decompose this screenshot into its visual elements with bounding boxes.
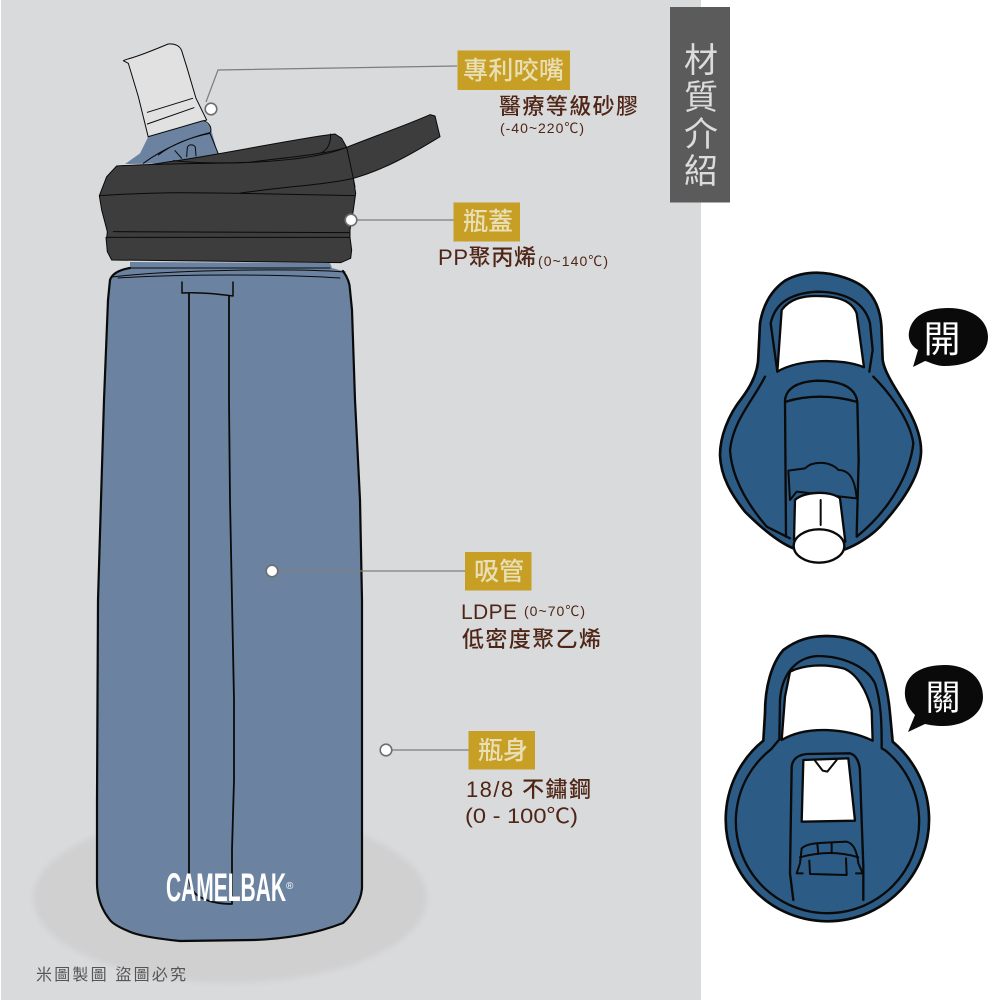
text: mouthpiece temperature: (-40~220℃): [500, 120, 584, 136]
blue valve base: [125, 121, 218, 164]
straw: [189, 294, 234, 904]
straw strap: [117, 115, 440, 193]
panel: grey background: [1, 0, 701, 1000]
text: lid temperature: (0~140℃): [538, 253, 608, 269]
tag: straw: [465, 552, 532, 590]
callout: body: [380, 731, 591, 828]
title text: 紹: [684, 153, 718, 191]
closed lid window: [802, 758, 855, 822]
text: body material: 18/8 不鏽鋼: [466, 777, 591, 802]
closed lid handle hole: [782, 665, 873, 741]
tag: lid: [454, 202, 520, 242]
text: mouthpiece material: 醫療等級砂膠: [499, 94, 638, 119]
text: straw material: LDPE: [461, 601, 517, 624]
title text: 介: [684, 116, 718, 154]
bottle shadow: [33, 813, 427, 983]
title text: 質: [684, 79, 718, 117]
lid seam lines: [100, 134, 355, 233]
open lid slot: [785, 381, 859, 537]
speech bubble: open: 開: [924, 319, 960, 360]
speech bubble: closed: [905, 665, 983, 732]
logo: CamelBak: ®: [286, 881, 294, 892]
tag: mouthpiece: [458, 50, 570, 90]
valve detail: [143, 121, 218, 163]
closed lid slot: [790, 753, 863, 900]
open lid illustration: [720, 273, 921, 563]
bottle body: [97, 262, 362, 941]
open lid latch: [788, 463, 857, 500]
speech bubble: closed: 關: [925, 679, 961, 718]
title text: 材: [684, 42, 718, 80]
lid band: [99, 147, 356, 238]
title text: [684, 42, 718, 191]
illustration: bottle: [97, 44, 440, 941]
callout: straw: [266, 552, 601, 652]
tag: body: [468, 731, 535, 770]
logo: CamelBak: [166, 866, 294, 910]
open lid spout tip: [794, 529, 844, 563]
closed lid latch: [797, 842, 863, 875]
closed lid shape: [726, 636, 929, 921]
open lid shape: [720, 273, 921, 549]
mouthpiece: [123, 44, 207, 137]
tag: body: 瓶身: [478, 737, 528, 765]
text: straw material name: 低密度聚乙烯: [462, 627, 601, 652]
open lid spout: [794, 493, 845, 542]
window notch: [815, 760, 837, 772]
bottle outline: [97, 268, 362, 941]
lower ring: [106, 237, 352, 263]
tag: mouthpiece: 專利咬嘴: [463, 57, 564, 85]
text: straw temperature: (0~70℃): [524, 603, 585, 619]
closed lid inner lines: [736, 656, 919, 913]
logo: CamelBak: CAMELBAK: [166, 866, 286, 910]
bottle lid: [99, 44, 440, 263]
spout mark: [818, 500, 824, 525]
closed lid illustration: [726, 636, 929, 921]
speech bubble: open: [909, 308, 988, 367]
callout: lid: [345, 202, 608, 270]
mouthpiece ridges: [147, 98, 194, 124]
footer note: 米圖製圖 盜圖必究: [36, 966, 186, 984]
straw tab: [182, 282, 233, 296]
open lid handle hole: [777, 296, 864, 372]
title panel: [670, 7, 730, 202]
text: lid material: PP聚丙烯: [438, 245, 536, 270]
callout: mouthpiece: [205, 50, 638, 136]
tag: straw: 吸管: [474, 558, 524, 586]
tag: lid: 瓶蓋: [463, 208, 513, 236]
text: body temperature: (0 - 100℃): [465, 805, 578, 828]
shoulder lines: [112, 268, 345, 278]
open lid inner lines: [730, 292, 913, 538]
